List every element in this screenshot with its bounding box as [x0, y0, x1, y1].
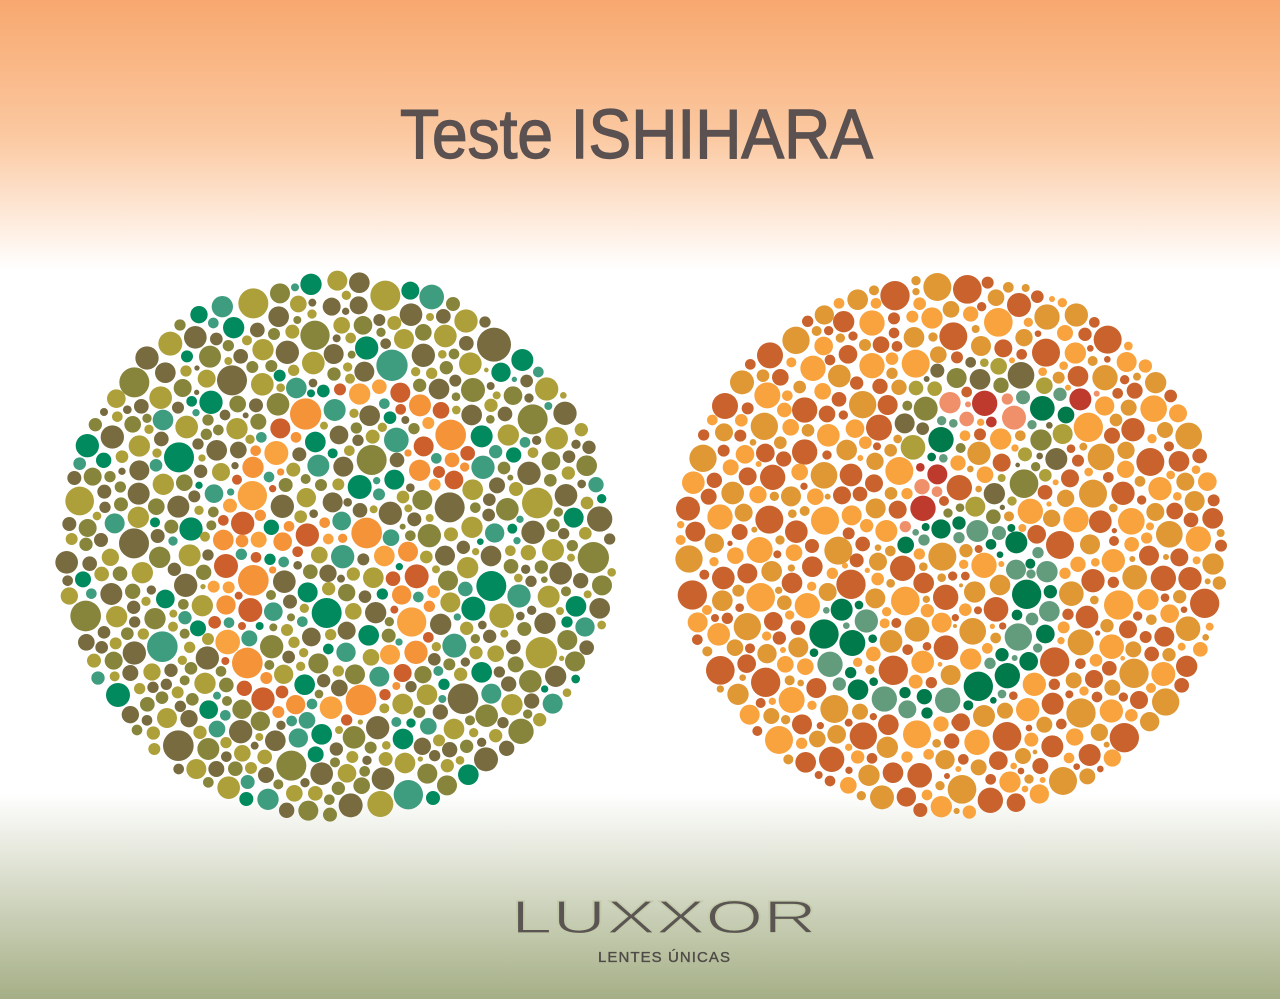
title: Teste ISHIHARA: [400, 95, 873, 173]
logo wordmark: LUXXOR: [511, 891, 817, 943]
bottom green gradient band: [0, 793, 1280, 999]
plate 1 lower-right dots: [330, 539, 616, 817]
logo tagline: LENTES ÚNICAS: [598, 949, 730, 966]
plate 2 lower-right dots: [948, 540, 1227, 819]
plate 1 lower-left dots: [55, 544, 342, 822]
plate 2: orange dots with hidden green number: [675, 273, 1227, 819]
plate 1: olive and green dots with hidden orange number: [55, 271, 616, 822]
plate 1 upper-right dots: [323, 271, 615, 548]
top orange gradient band: [0, 0, 1280, 270]
plate 2 upper-right dots: [947, 275, 1225, 559]
plate 2 lower-left dots: [675, 537, 962, 817]
plate 2 upper-left dots: [676, 273, 967, 553]
plate 1 upper-left dots: [62, 274, 334, 558]
